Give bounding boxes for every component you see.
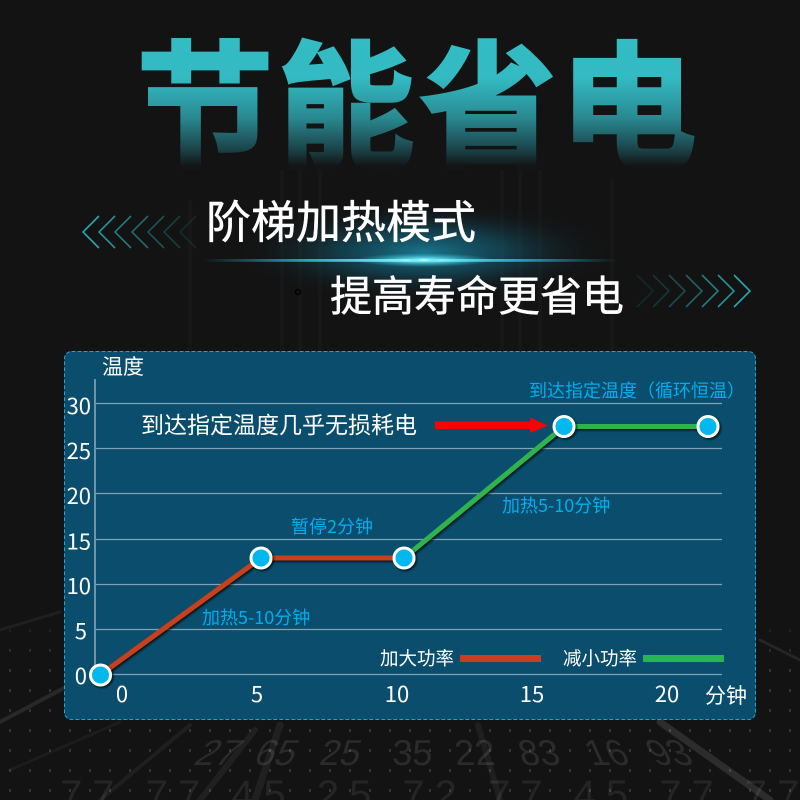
decorative digits floor: 35	[392, 732, 433, 773]
data points	[90, 416, 718, 685]
decorative digits floor: 65	[249, 732, 305, 773]
y axis labels: 30	[67, 389, 91, 421]
x axis labels: 0	[116, 677, 128, 709]
panel background	[64, 352, 756, 720]
callout text: 到达指定温度几乎无损耗电	[141, 406, 417, 440]
chevrons left	[83, 216, 196, 248]
small ring mark	[296, 290, 300, 294]
label: pause: 暂停2分钟	[291, 513, 373, 539]
decorative digits floor: 22	[453, 732, 497, 773]
panel: temperature chart	[64, 351, 756, 720]
grid lines	[96, 404, 722, 674]
title: 省	[419, 0, 557, 196]
y axis labels: 15	[67, 524, 91, 556]
subtitle line 1: 阶梯加热模式	[206, 186, 476, 251]
line: reduced power	[404, 426, 708, 558]
title: 能	[277, 0, 415, 196]
decorative digits floor: 16	[578, 733, 635, 773]
label: constant temperature: 到达指定温度（循环恒温）	[529, 377, 745, 403]
x axis labels: 15	[520, 677, 544, 709]
red arrow	[435, 418, 548, 433]
y axis labels: 10	[67, 569, 91, 601]
y axis	[94, 379, 96, 675]
chevrons right	[637, 275, 750, 307]
label: heating lower: 加热5-10分钟	[202, 604, 310, 630]
background	[0, 610, 800, 800]
x axis unit: 分钟	[705, 680, 747, 710]
label: heating upper: 加热5-10分钟	[502, 492, 610, 518]
decorative digits floor: 83	[514, 733, 564, 773]
decorative digits floor: 27	[187, 734, 250, 773]
title: 节	[136, 0, 274, 196]
x axis labels	[116, 677, 679, 709]
line: increased power	[100, 558, 404, 675]
x axis labels: 20	[655, 677, 679, 709]
title: 电	[559, 0, 697, 196]
y axis labels: 5	[75, 614, 87, 646]
legend: 加大功率	[380, 645, 454, 671]
x axis labels: 5	[251, 677, 263, 709]
x axis labels: 10	[385, 677, 409, 709]
y axis labels: 20	[67, 479, 91, 511]
y axis labels: 0	[75, 659, 87, 691]
decorative digits floor: 93	[638, 734, 701, 773]
decorative digits floor	[60, 732, 800, 800]
y axis labels: 25	[67, 434, 91, 466]
legend	[380, 645, 724, 671]
decorative digits floor: 25	[316, 733, 366, 773]
subtitle line 2: 提高寿命更省电	[330, 263, 624, 324]
title	[136, 0, 697, 196]
y axis title: 温度	[102, 351, 144, 381]
y axis labels	[67, 389, 91, 691]
legend: 减小功率	[563, 645, 637, 671]
glow line	[203, 202, 617, 302]
